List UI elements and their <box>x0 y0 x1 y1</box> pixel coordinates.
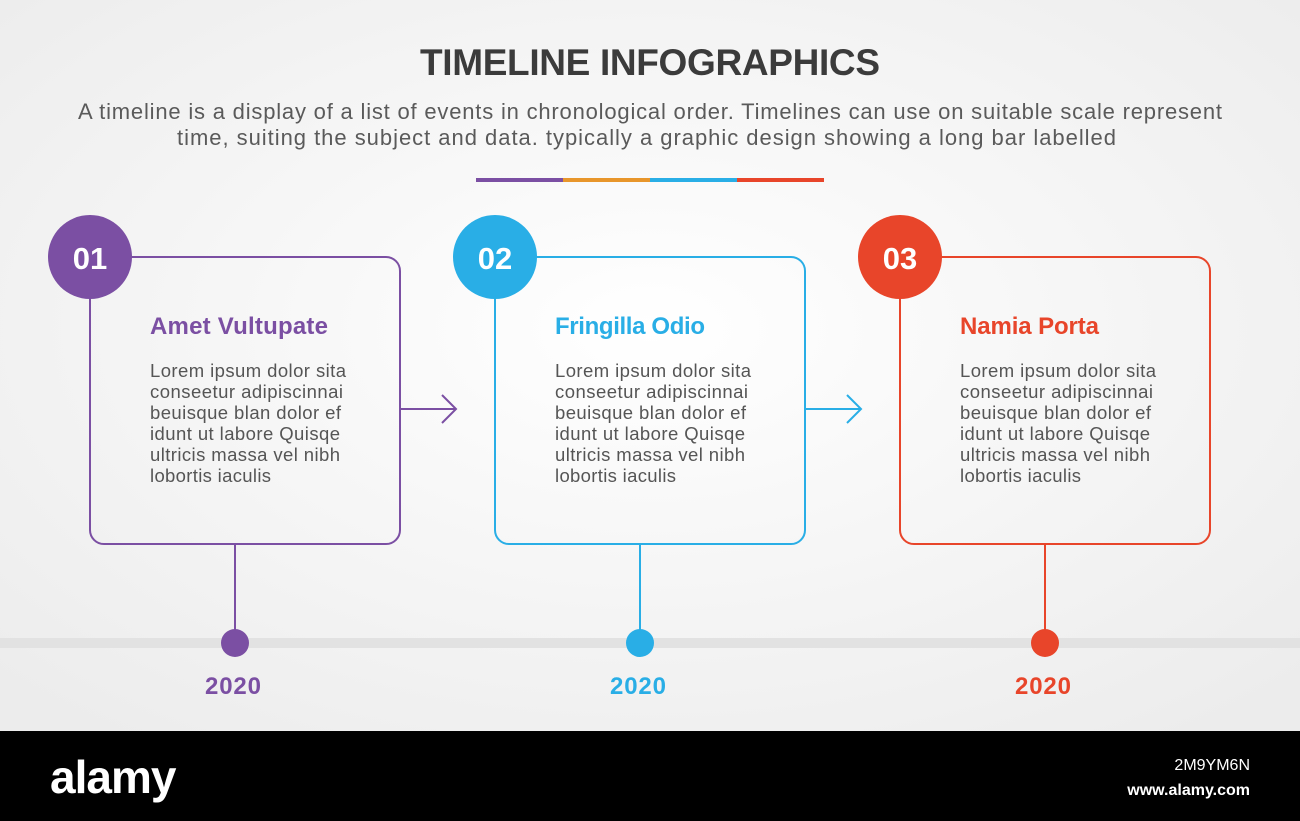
panel: step 3: lobortis iaculis <box>960 465 1081 486</box>
panel: step 2: beuisque blan dolor ef <box>555 402 747 423</box>
arrow 2 <box>805 395 861 423</box>
panel: step 1: Lorem ipsum dolor sita <box>150 360 347 381</box>
panel: step 2: lobortis iaculis <box>555 465 676 486</box>
subtitle: time, suiting the subject and data. typically a graphic design showing a long bar labelled <box>177 125 1116 150</box>
panel: step 1: lobortis iaculis <box>150 465 271 486</box>
panel: step 2: idunt ut labore Quisqe <box>555 423 745 444</box>
panel: step 2 <box>453 215 805 700</box>
panel: step 3: idunt ut labore Quisqe <box>960 423 1150 444</box>
timeline bar <box>0 638 1300 648</box>
panel: step 2: 02 <box>478 241 512 276</box>
footer <box>0 731 1300 821</box>
panel: step 3: beuisque blan dolor ef <box>960 402 1152 423</box>
color bar <box>476 178 824 182</box>
panel: step 3: 2020 <box>1015 673 1071 700</box>
panel: step 3: Namia Porta <box>960 313 1100 340</box>
panel: step 1: conseetur adipiscinnai <box>150 381 343 402</box>
panel: step 1: Amet Vultupate <box>150 313 328 340</box>
panel: step 2: Lorem ipsum dolor sita <box>555 360 752 381</box>
panel: step 3: ultricis massa vel nibh <box>960 444 1150 465</box>
panel: step 3: 03 <box>883 241 917 276</box>
panel: step 1: ultricis massa vel nibh <box>150 444 340 465</box>
panel: step 2: conseetur adipiscinnai <box>555 381 748 402</box>
panel: step 1: beuisque blan dolor ef <box>150 402 342 423</box>
panel: step 3: Lorem ipsum dolor sita <box>960 360 1157 381</box>
footer: www.alamy.com <box>1126 782 1250 799</box>
panel: step 1: 01 <box>73 241 107 276</box>
arrow 1 <box>400 395 456 423</box>
panel: step 1: 2020 <box>205 673 261 700</box>
footer: 2M9YM6N <box>1174 757 1250 774</box>
panel: step 2: 2020 <box>610 673 666 700</box>
footer: alamy <box>50 751 177 803</box>
panel: step 2: Fringilla Odio <box>555 313 705 340</box>
subtitle <box>78 99 1222 150</box>
panel: step 3: conseetur adipiscinnai <box>960 381 1153 402</box>
panel: step 3 <box>858 215 1210 700</box>
panel: step 1: idunt ut labore Quisqe <box>150 423 340 444</box>
panel: step 2: ultricis massa vel nibh <box>555 444 745 465</box>
subtitle: A timeline is a display of a list of events in chronological order. Timelines can use on suitable scale represent <box>78 99 1222 124</box>
panel: step 1 <box>48 215 400 700</box>
title: TIMELINE INFOGRAPHICS <box>420 42 880 83</box>
